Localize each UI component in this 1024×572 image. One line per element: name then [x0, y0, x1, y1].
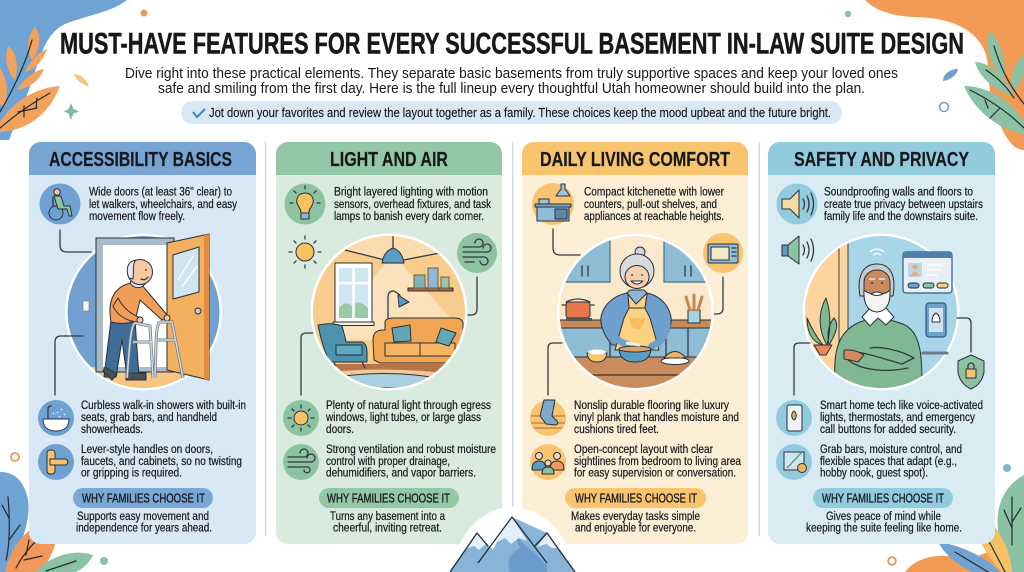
text: kitchenette — [584, 184, 724, 223]
text: layered lighting: sensors, overhead fixtures, and task — [334, 197, 492, 211]
connector: sun to room — [301, 333, 313, 395]
icon: family group — [530, 444, 566, 480]
text: open-concept layout: sightlines from bedroom to living area — [574, 454, 741, 468]
text: soundproofing: Soundproofing walls and floors to — [824, 184, 973, 198]
intro text: safe and smiling from the first day. Here is the full lineup every thoughtful Utah homeowner should build into the plan. — [158, 81, 865, 97]
text: ventilation — [326, 442, 496, 480]
text: family benefit: independence for years ahead. — [76, 520, 212, 534]
icon: green speaker — [782, 236, 814, 264]
icon: smartphone — [776, 400, 812, 436]
badge: why families choose it — [73, 488, 213, 508]
connector: wind to room — [467, 277, 477, 315]
text: family benefit: Makes everyday tasks simple — [571, 509, 700, 523]
text: flooring: vinyl plank that handles moisture and — [574, 410, 739, 424]
text: curbless showers: Curbless walk-in showers with built-in — [81, 398, 246, 412]
text: layered lighting: lamps to banish every dark corner. — [334, 209, 484, 223]
badge: why families choose it: WHY FAMILIES CHOOSE IT — [575, 492, 697, 506]
panel: daily living comfort — [522, 142, 748, 544]
text: lever handles: Lever-style handles on doors, — [81, 442, 213, 456]
text: layered lighting: Bright layered lighting with motion — [334, 184, 488, 198]
icon: shield lock — [958, 355, 984, 389]
text: lever handles — [81, 442, 242, 480]
text: grab bars: hobby nook, guest spot). — [820, 466, 928, 480]
connector: smart tech to illustration — [794, 343, 810, 395]
illustration: living room — [310, 232, 470, 392]
icon: bathtub — [38, 400, 74, 436]
text: ventilation: dehumidifiers, and vapor barriers. — [326, 466, 476, 480]
text: kitchenette: counters, pull-out shelves, and — [584, 197, 717, 211]
icon: speaker badge — [776, 184, 818, 224]
text: smart home tech: call buttons for added security. — [820, 422, 956, 436]
text: wide doors: let walkers, wheelchairs, and easy — [89, 197, 238, 211]
text: open-concept layout: for easy supervision or conversation. — [574, 466, 736, 480]
icon: wind badge — [457, 233, 497, 273]
text: kitchenette: appliances at reachable heights. — [584, 209, 724, 223]
decoration: top-right orange blob and green leaves — [845, 0, 1024, 150]
text: family benefit: Turns any basement into a — [330, 509, 445, 523]
heading: accessibility basics: ACCESSIBILITY BASICS — [49, 148, 232, 171]
text: layered lighting — [334, 184, 492, 223]
icon: mountain emblem — [450, 507, 575, 572]
text: family benefit — [571, 509, 700, 534]
text: curbless showers — [81, 398, 246, 436]
text: flooring: cushions tired feet. — [574, 422, 659, 436]
badge: why families choose it: WHY FAMILIES CHOOSE IT — [327, 492, 450, 506]
text: family benefit — [330, 509, 445, 534]
text: ventilation: control with proper drainage, — [326, 454, 450, 468]
icon: kitchenette — [532, 183, 574, 225]
connector: shield to illustration — [957, 318, 971, 352]
text: flooring — [574, 398, 739, 436]
text: lever handles: faucets, and cabinets, so no twisting — [81, 454, 242, 468]
text: soundproofing: family life and the downstairs suite. — [824, 209, 978, 223]
connector: shower to illustration — [55, 336, 83, 395]
text: family benefit: and enjoyable for everyone. — [575, 520, 696, 534]
connector: flooring to kitchen — [548, 343, 562, 395]
text: grab bars — [820, 442, 962, 480]
icon: wind small badge — [283, 444, 319, 480]
text: natural light: windows, light tubes, or large glass — [325, 410, 481, 424]
decoration: bottom-right leaves — [888, 464, 1024, 572]
badge: why families choose it — [319, 488, 459, 508]
text: wide doors: Wide doors (at least 36" clear) to — [89, 184, 232, 198]
badge: why families choose it: WHY FAMILIES CHOOSE IT — [822, 492, 944, 506]
text: natural light — [325, 398, 491, 436]
text: curbless showers: showerheads. — [81, 422, 143, 436]
text: wide doors: movement flow freely. — [89, 209, 185, 223]
connector: kitchenette to kitchen — [553, 229, 580, 255]
badge: why families choose it — [813, 488, 953, 508]
icon: microwave — [703, 233, 743, 273]
text: flooring: Nonslip durable flooring like luxury — [574, 398, 730, 412]
text: open-concept layout: Open-concept layout with clear — [574, 442, 713, 456]
text: family benefit: keeping the suite feeling like home. — [806, 520, 962, 534]
text: grab bars: flexible spaces that adapt (e.g., — [820, 454, 957, 468]
text: curbless showers: seats, grab bars, and handheld — [81, 410, 217, 424]
text: family benefit: Supports easy movement and — [77, 509, 209, 523]
intro text: Dive right into these practical elements. They separate basic basements from truly supportive spaces and keep your loved ones — [125, 66, 898, 82]
panel: light and air — [276, 142, 502, 544]
text: smart home tech — [820, 398, 983, 436]
text: soundproofing: create true privacy between upstairs — [824, 197, 983, 211]
text: kitchenette: Compact kitchenette with lower — [584, 184, 724, 198]
text: smart home tech: Smart home tech like voice-activated — [820, 398, 983, 412]
heading: daily living comfort: DAILY LIVING COMFORT — [540, 148, 730, 171]
badge: why families choose it — [565, 488, 706, 508]
text: family benefit: Gives peace of mind while — [826, 509, 941, 523]
connector: wheelchair to door — [60, 230, 91, 252]
illustration: man with walker at door — [65, 234, 222, 390]
text: lever handles: or gripping is required. — [81, 466, 182, 480]
badge: why families choose it: WHY FAMILIES CHOOSE IT — [82, 492, 205, 506]
intro text — [125, 66, 898, 97]
icon: lever handle — [38, 444, 74, 480]
text: soundproofing — [824, 184, 983, 223]
icon: light bulb — [284, 184, 326, 224]
icon: nonslip foot — [530, 400, 566, 436]
text: grab bars: Grab bars, moisture control, and — [820, 442, 962, 456]
text: open-concept layout — [574, 442, 741, 480]
callout: family tip: Jot down your favorites and review the layout together as a family. These choices keep the mood upbeat and the future bright. — [209, 105, 831, 120]
decoration: bottom-left leaves — [0, 453, 108, 572]
text: smart home tech: lights, thermostats, and emergency — [820, 410, 976, 424]
text: natural light: doors. — [326, 422, 354, 436]
text: ventilation: Strong ventilation and robust moisture — [326, 442, 496, 456]
heading: light and air: LIGHT AND AIR — [330, 148, 448, 171]
icon: wheelchair — [40, 184, 80, 224]
callout: family tip — [181, 101, 842, 124]
text: natural light: Plenty of natural light through egress — [326, 398, 491, 412]
connector: microwave to kitchen — [714, 277, 723, 314]
panel: safety and privacy — [768, 142, 995, 544]
icon: floor plan — [776, 444, 812, 480]
icon: sun — [289, 236, 321, 268]
panel: accessibility basics — [29, 142, 256, 544]
text: family benefit: cheerful, inviting retreat. — [333, 520, 442, 534]
decoration: top-left blue blob and orange leaves — [0, 0, 148, 140]
heading: safety and privacy: SAFETY AND PRIVACY — [794, 148, 969, 171]
illustration: man with smart devices — [800, 232, 965, 392]
text: family benefit — [806, 509, 962, 534]
illustration: grandmother cooking — [555, 232, 720, 397]
text: family benefit — [76, 509, 212, 534]
text: wide doors — [89, 184, 238, 223]
icon: sun badge — [283, 400, 319, 436]
